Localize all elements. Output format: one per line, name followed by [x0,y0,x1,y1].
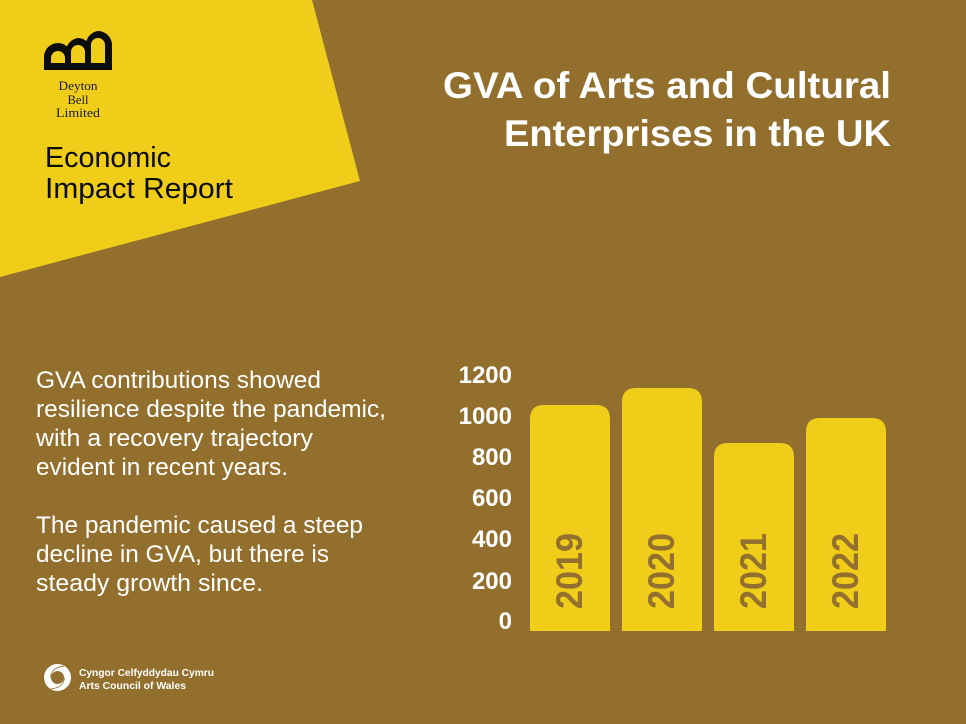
bar: 2022 [806,418,886,631]
bar: 2022: 2022 [825,533,866,609]
text: company name [56,79,101,120]
text: company name: Bell [68,93,89,107]
title: GVA of Arts and Cultural [443,65,891,106]
text: Arts Council of Wales: Arts Council of Wales [79,680,186,692]
text block: resilience summary [35,367,386,481]
y axis labels: 200 [472,568,512,595]
bar: 2019: 2019 [549,533,590,609]
title: Enterprises in the UK [504,113,891,154]
text: company name: Deyton [58,79,98,93]
text: Arts Council of Wales [79,667,214,692]
icon: Arts Council of Wales ring [48,666,68,689]
panel: yellow header shape [0,0,360,277]
heading: report name: Impact Report [45,173,233,205]
text block: resilience summary: evident in recent years. [36,454,288,481]
icon: Deyton Bell Limited logo [44,31,112,70]
text block: resilience summary: with a recovery trajectory [35,425,313,452]
y axis labels: 600 [472,485,512,512]
y axis labels: 0 [499,608,512,635]
title [443,65,891,154]
y axis labels: 400 [472,526,512,553]
bar: 2021: 2021 [733,533,774,609]
text block: resilience summary: GVA contributions showed [36,367,321,394]
y axis labels: 1200 [459,362,512,389]
text block: pandemic decline: steady growth since. [36,570,263,597]
heading: report name: Economic [45,142,171,174]
text: company name: Limited [56,106,101,120]
y axis labels [459,362,512,635]
bar: 2020 [622,388,702,631]
text block: pandemic decline: decline in GVA, but there is [36,541,329,568]
text: Arts Council of Wales: Cyngor Celfyddydau Cymru [79,667,214,679]
y axis labels: 800 [472,444,512,471]
bar: 2021 [714,443,794,631]
bar: 2019 [530,405,610,631]
y axis labels: 1000 [459,403,512,430]
heading: report name [45,142,233,205]
bar chart [459,362,886,635]
text block: resilience summary: resilience despite the pandemic, [36,396,386,423]
text block: pandemic decline: The pandemic caused a steep [36,512,363,539]
bar: 2020: 2020 [641,533,682,609]
text block: pandemic decline [36,512,363,597]
